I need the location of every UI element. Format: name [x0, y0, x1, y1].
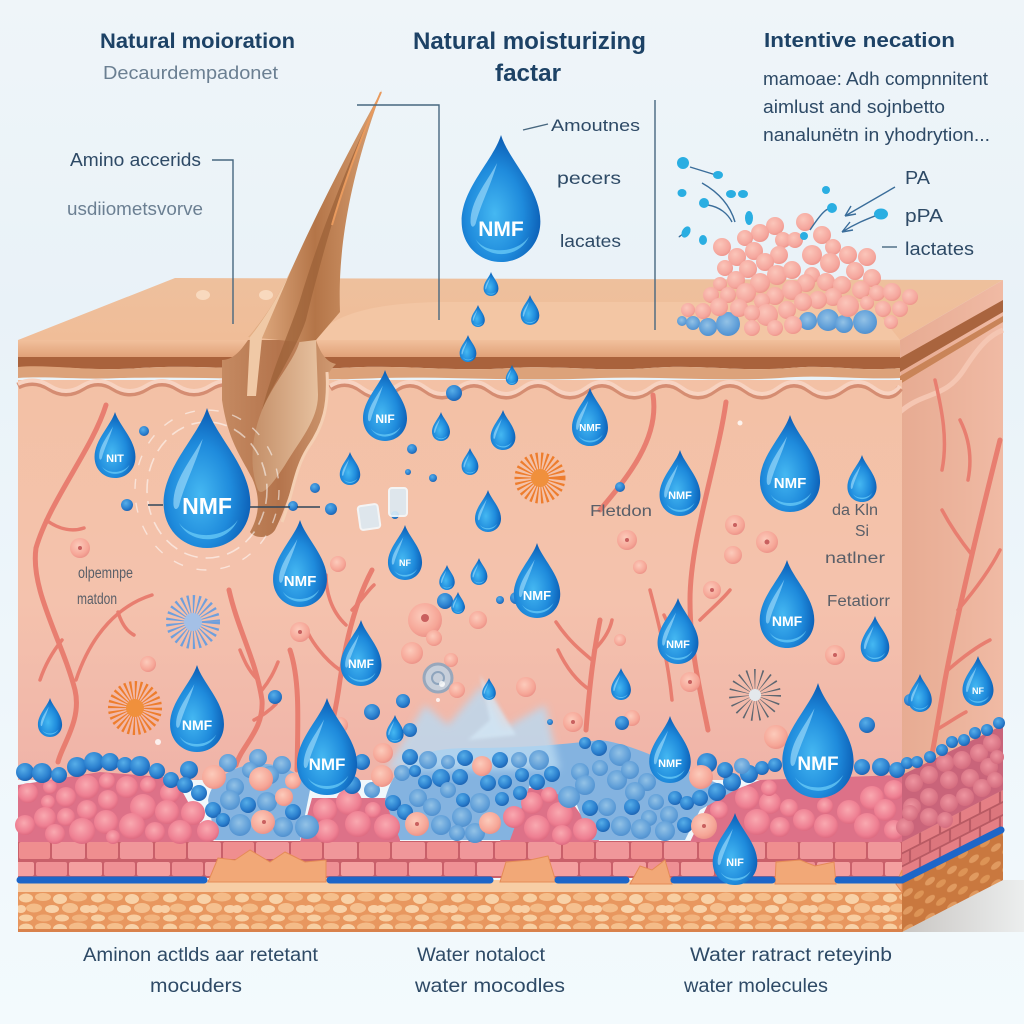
caption: water retaining: water molecules [683, 976, 828, 997]
orange cell patches [208, 850, 902, 892]
top right cell pile [677, 157, 918, 336]
NMF water drops: NMF [774, 475, 806, 492]
labels: inside dermis: natlner [825, 550, 885, 567]
splash of water [385, 664, 560, 770]
labels: inside dermis: da Kln [832, 502, 878, 519]
heading: natural moioration: Natural moioration [100, 30, 295, 53]
follicle tan interior [252, 340, 318, 492]
caption: amino acids: Aminon actlds aar retetant [83, 945, 319, 966]
droplets and arrows [677, 157, 895, 245]
drop: left upper [95, 412, 135, 478]
NMF water drops: NF [399, 558, 411, 568]
ice crystals [357, 488, 407, 530]
caption: amino acids: mocuders [150, 976, 242, 997]
icon: blue cell [176, 605, 210, 639]
starburst cells [118, 462, 770, 725]
drop: large NMF left [164, 408, 250, 548]
labels: pile components: lactates [905, 239, 974, 259]
NMF water drops: NMF [523, 588, 551, 603]
NMF water drops: NMF [309, 755, 345, 774]
dermal boundary wave [18, 382, 900, 396]
icon: orange cell left [118, 691, 152, 725]
brick epidermis layer [18, 790, 1003, 880]
labels: pile components [905, 168, 974, 259]
heading: natural moioration [100, 30, 295, 83]
caption: water molecules: Water notaloct [417, 945, 546, 966]
labels: inside dermis [77, 502, 890, 610]
label: amino acids: usdiiometsvorve [67, 199, 203, 219]
heading: natural moisturizing factor: Natural moisturizing [413, 28, 646, 55]
icon: orange cell right [524, 462, 556, 494]
leader lines [148, 100, 897, 507]
NMF water drops: NMF [658, 758, 682, 770]
NMF water drops: NF [972, 686, 984, 696]
labels: pile components: PA [905, 168, 930, 188]
follicle outline [282, 372, 327, 522]
right side face [900, 280, 1003, 932]
NMF water drops [38, 135, 994, 885]
NMF water drops: NMF [182, 717, 213, 733]
labels: inside dermis: Si [855, 523, 869, 540]
NMF water drops: NMF [666, 639, 690, 651]
label: amino acids [67, 149, 203, 219]
icon: grey cell [740, 680, 770, 710]
skin top surface [18, 278, 1003, 340]
NMF water drops: NMF [797, 754, 839, 775]
caption: water retaining [683, 945, 892, 997]
NMF water drops: NMF [579, 423, 601, 434]
labels: NMF components: pecers [557, 168, 621, 188]
heading: natural moisturizing factor [413, 28, 646, 87]
labels: inside dermis: Fletdon [590, 503, 652, 520]
blue base cells [677, 309, 877, 336]
stratum corneum slab [18, 340, 900, 358]
dermal boundary highlight [18, 380, 900, 394]
NMF water drops: NMF [668, 490, 692, 502]
skin surface bumps [196, 290, 273, 300]
pink cell clusters [15, 725, 1004, 845]
labels: inside dermis: matdon [77, 591, 117, 608]
skin block [18, 278, 1003, 932]
pink pile cells [681, 213, 918, 336]
labels: NMF components [551, 116, 640, 251]
heading: intentive necation [763, 29, 990, 145]
drop: left upper: NIT [106, 453, 124, 465]
hypodermis fat layer [18, 830, 1003, 932]
heading: natural moisturizing factor: factar [495, 60, 561, 87]
dermis [18, 380, 902, 780]
label: amino acids: Amino accerids [70, 149, 201, 170]
hair left flap [247, 268, 292, 396]
blood vessels [35, 380, 1000, 770]
blue membrane line [20, 830, 1001, 880]
drop: upper [363, 370, 407, 441]
labels: inside dermis: olpemnpe [78, 565, 133, 582]
caption: water molecules [414, 945, 565, 997]
caption: water retaining: Water ratract reteyinb [690, 945, 892, 966]
skin block shadow [902, 880, 1024, 932]
hair highlight [332, 92, 381, 225]
hair dark streak [262, 105, 375, 410]
labels: pile components: pPA [905, 206, 943, 226]
brown band [18, 357, 900, 369]
right face bands [900, 300, 1003, 412]
raised skin flap [313, 302, 900, 340]
hair shaft [248, 90, 382, 342]
follicle sheath [222, 340, 336, 537]
heading: intentive necation: mamoae: Adh compnnitent [763, 69, 988, 89]
heading: intentive necation: nanalunëtn in yhodrytion... [763, 125, 990, 145]
tan band [18, 366, 900, 379]
cell layer backing [18, 740, 902, 842]
caption: amino acids [83, 945, 319, 997]
drop: upper: NIF [375, 412, 395, 426]
labels: inside dermis: Fetatiorr [827, 593, 890, 610]
drop: large NMF left: NMF [182, 493, 232, 519]
cells near splash [155, 420, 742, 745]
drop: main NMF [462, 135, 540, 262]
heading: intentive necation: Intentive necation [764, 29, 955, 52]
labels: NMF components: Amoutnes [551, 116, 640, 135]
labels: NMF components: lacates [560, 231, 621, 251]
NMF water drops: NMF [348, 657, 374, 671]
hair follicle [222, 90, 382, 537]
heading: intentive necation: aimlust and sojnbetto [763, 97, 945, 117]
NMF water drops: NMF [772, 613, 803, 629]
blue cell clusters [16, 717, 1005, 843]
NMF water drops: NMF [284, 573, 316, 590]
pale pink cells with nucleus [70, 515, 845, 839]
heading: natural moioration: Decaurdempadonet [103, 62, 278, 83]
drop: main NMF: NMF [478, 218, 524, 241]
caption: water molecules: water mocodles [414, 976, 565, 997]
ripples around big drop [135, 410, 279, 570]
NMF water drops: NIF [726, 857, 744, 869]
small water dots [121, 385, 916, 737]
